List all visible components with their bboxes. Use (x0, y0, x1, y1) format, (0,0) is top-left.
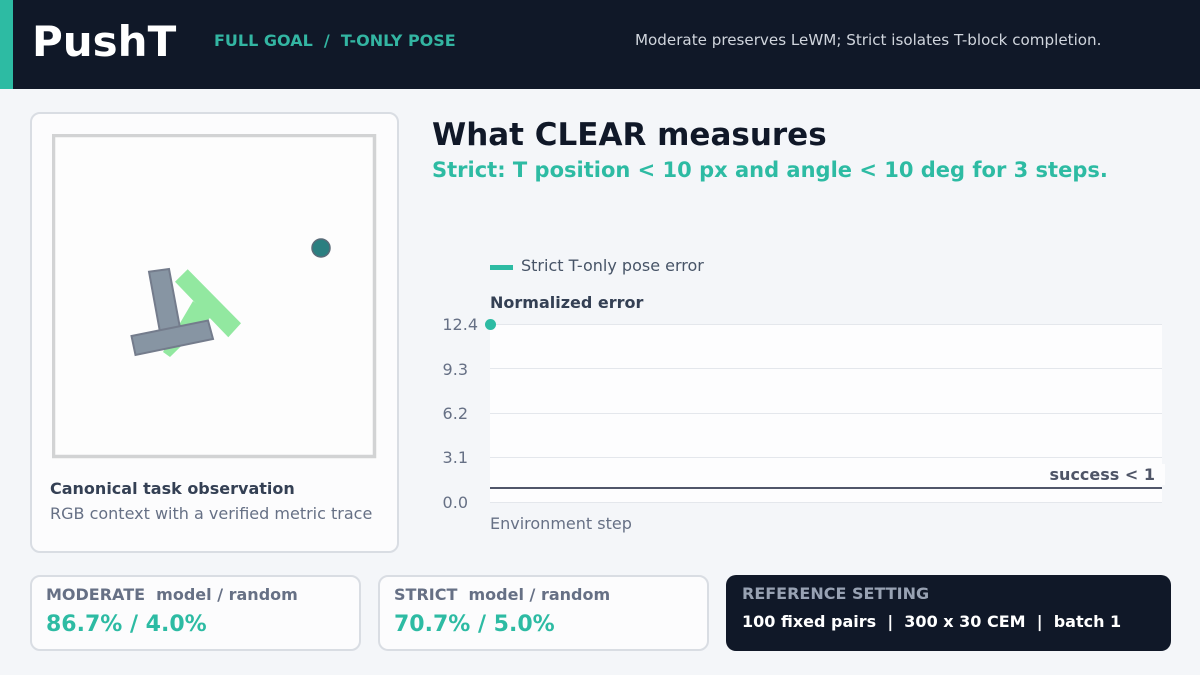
y axis labels: 12.4 (442, 315, 478, 334)
stat card: moderate (30, 575, 361, 651)
line chart (442, 256, 1165, 533)
stat label: STRICT model / random (394, 585, 610, 604)
icon: T block (132, 269, 213, 355)
image caption (50, 479, 372, 523)
observation image (52, 134, 376, 458)
header band (0, 0, 1200, 89)
title: PushT (32, 17, 176, 66)
data point (485, 319, 496, 330)
y axis labels: 3.1 (443, 448, 468, 467)
subheading: Strict: T position < 10 px and angle < 10 deg for 3 steps. (432, 158, 1108, 182)
reference setting card (726, 575, 1171, 651)
legend: Strict T-only pose error (521, 256, 704, 275)
y axis labels: 0.0 (443, 493, 468, 512)
reference label: REFERENCE SETTING (742, 584, 929, 603)
stat label: MODERATE model / random (46, 585, 298, 604)
heading: What CLEAR measures (432, 117, 827, 153)
y axis title: Normalized error (490, 293, 644, 312)
reference values: 100 fixed pairs | 300 x 30 CEM | batch 1 (742, 612, 1121, 631)
panel: task observation (30, 112, 399, 553)
y axis labels (442, 315, 478, 512)
plot area (490, 324, 1162, 502)
y axis labels: 6.2 (443, 404, 468, 423)
stat value: 70.7% / 5.0% (394, 612, 555, 637)
x axis title: Environment step (490, 514, 632, 533)
subtitle tag: FULL GOAL / T-ONLY POSE (214, 31, 456, 50)
accent stripe (0, 0, 13, 89)
caption title: Canonical task observation (50, 479, 295, 498)
icon: goal T pose (163, 269, 241, 357)
caption text: RGB context with a verified metric trace (50, 504, 372, 523)
y axis labels: 9.3 (443, 360, 468, 379)
icon: agent (312, 239, 330, 257)
threshold line (490, 487, 1162, 489)
threshold label: success < 1 (1050, 465, 1155, 484)
stat value: 86.7% / 4.0% (46, 612, 207, 637)
header note: Moderate preserves LeWM; Strict isolates T-block completion. (635, 31, 1101, 49)
stat card: strict (378, 575, 709, 651)
